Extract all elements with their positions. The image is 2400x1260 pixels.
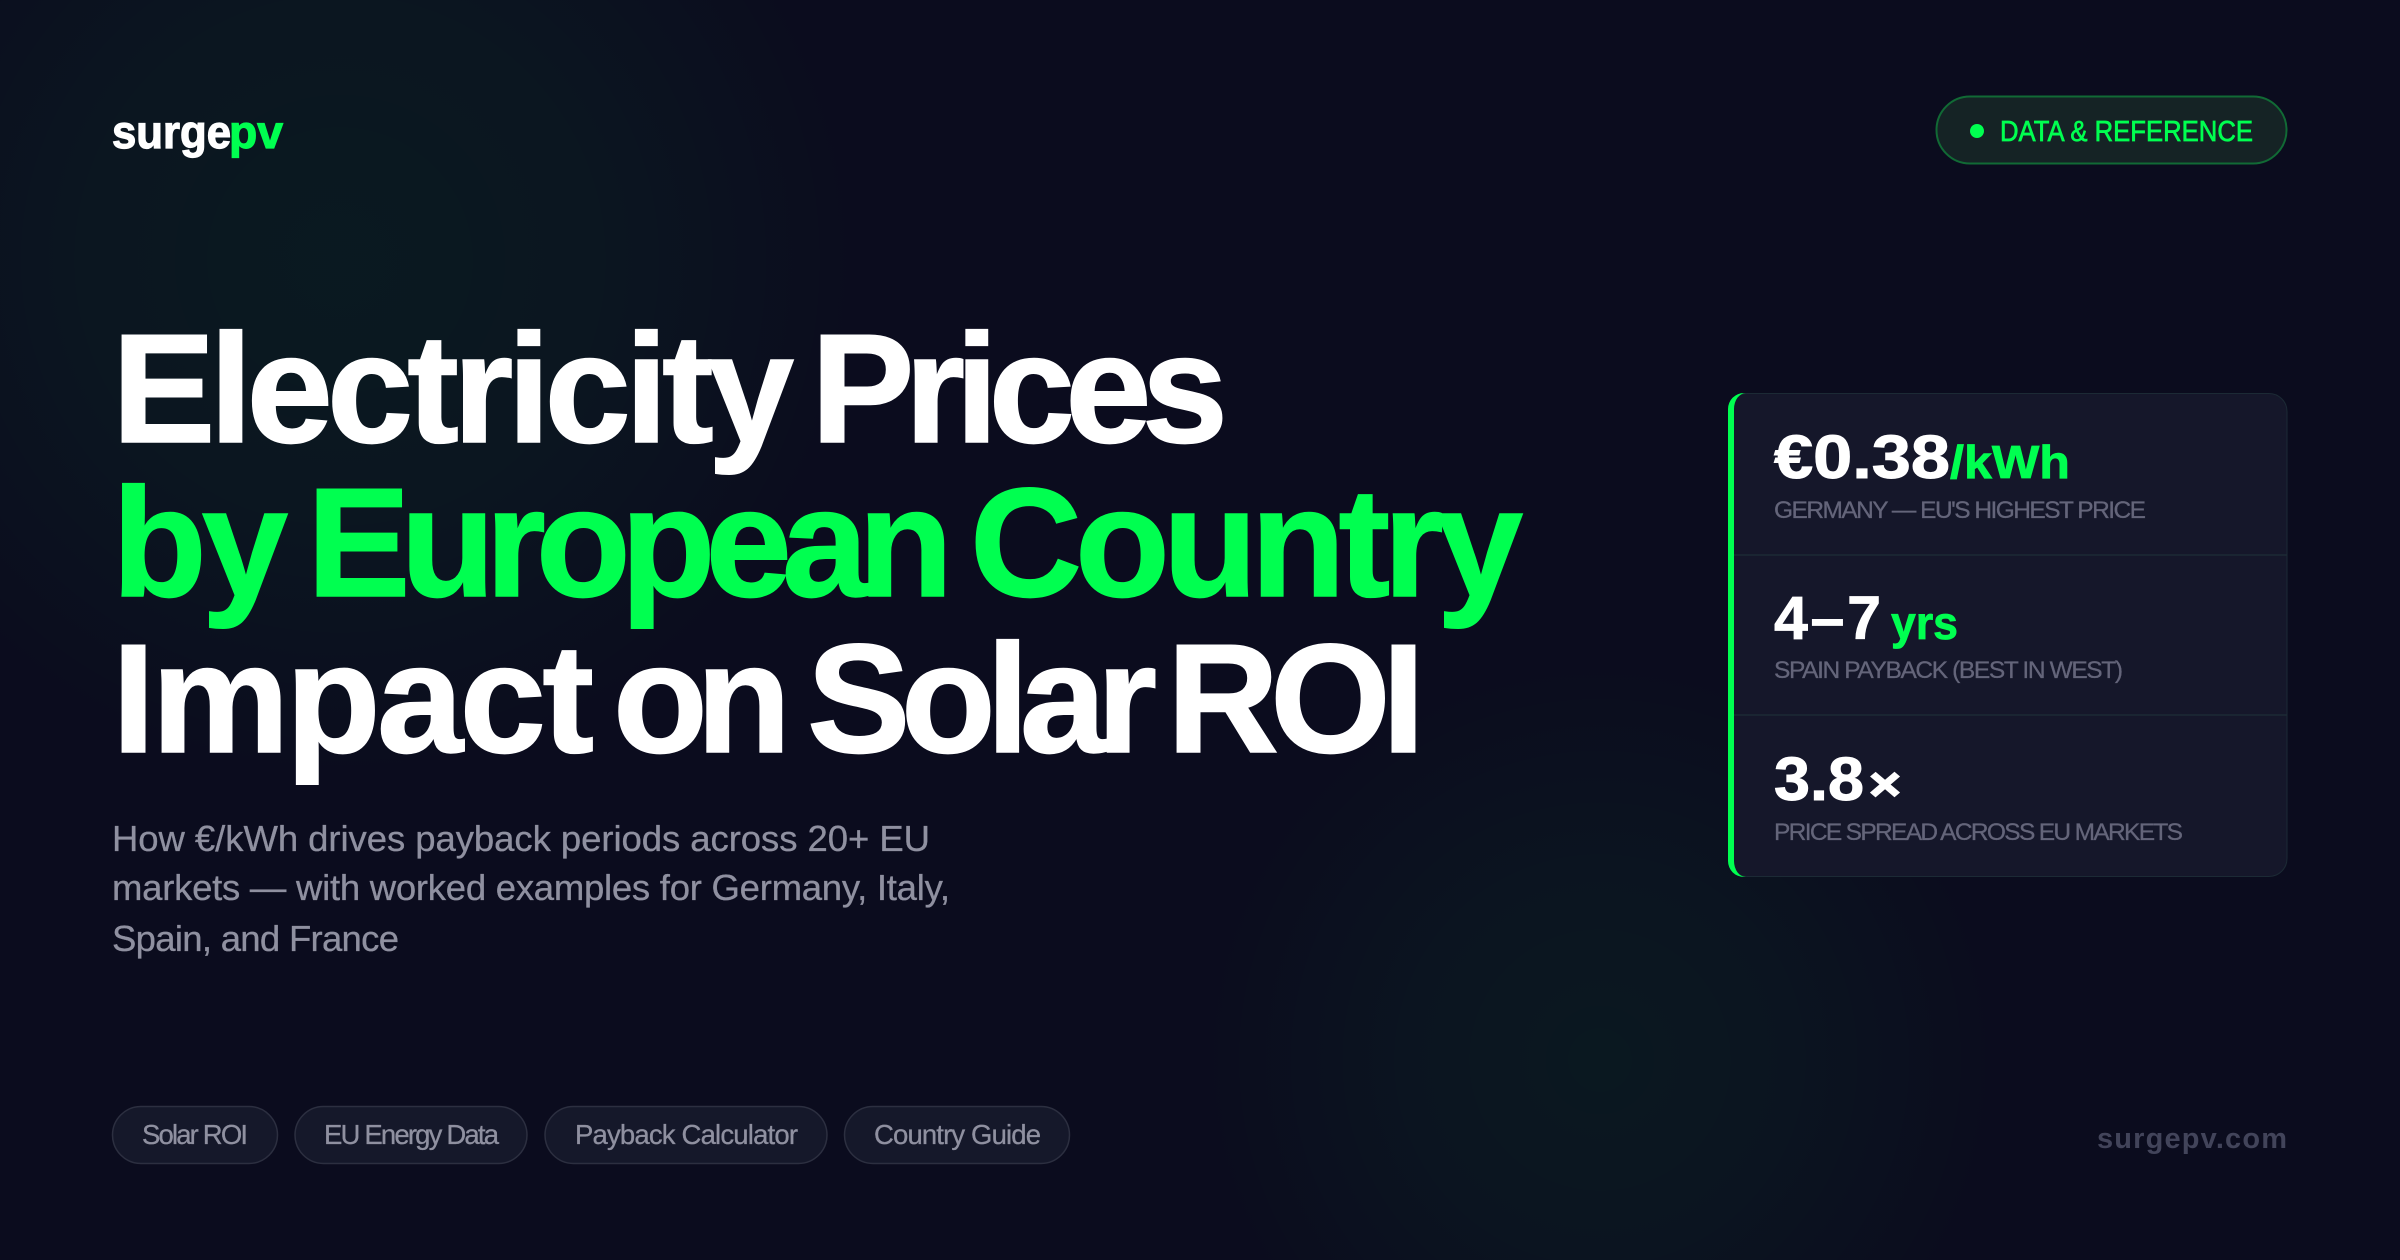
panel: key stats [1728,393,2287,877]
title: Electricity [112,302,794,475]
title: Solar [807,612,1157,785]
logo: pv [229,106,283,158]
website url: surgepv.com [2097,1123,2287,1155]
stat: spain payback [1774,584,2123,684]
tag: payback calculator [545,1106,827,1164]
stat: germany price [1774,423,2146,524]
title: Impact [112,612,594,785]
tag: solar roi [112,1106,278,1164]
stat: price spread: PRICE SPREAD ACROSS EU MARKETS [1774,819,2183,846]
subtitle: How €/kWh drives payback periods across 20+ EU [112,818,930,859]
stat: germany price: GERMANY — EU'S HIGHEST PRICE [1774,497,2146,524]
tag: country guide [844,1106,1070,1164]
title: ROI [1167,612,1425,785]
badge: data & reference: DATA & REFERENCE [2000,116,2253,148]
stat: germany price: €0.38 [1774,423,1950,491]
tag: solar roi: Solar ROI [142,1119,248,1150]
title [112,302,1523,785]
title: European [307,456,953,629]
title: on [613,612,791,785]
stat: spain payback: yrs [1891,597,1958,649]
tag: eu energy data [295,1106,527,1164]
title: Country [970,456,1523,629]
tag: payback calculator: Payback Calculator [575,1119,798,1150]
stat: price spread: × [1869,758,1901,810]
title: by [112,456,288,629]
subtitle [112,818,950,959]
tag: eu energy data: EU Energy Data [324,1119,500,1150]
stat: price spread: 3.8 [1774,745,1864,813]
tag: country guide: Country Guide [874,1119,1041,1150]
stat: spain payback: 4–7 [1774,584,1881,652]
stat: spain payback: SPAIN PAYBACK (BEST IN WEST) [1774,657,2123,684]
subtitle: markets — with worked examples for Germany, Italy, [112,867,950,908]
tags [112,1106,1070,1164]
badge: data & reference [1936,96,2286,164]
logo: surge [112,106,231,158]
stat: price spread [1774,745,2183,846]
title: Prices [811,302,1228,475]
subtitle: Spain, and France [112,918,399,959]
stat: germany price: /kWh [1950,436,2070,488]
